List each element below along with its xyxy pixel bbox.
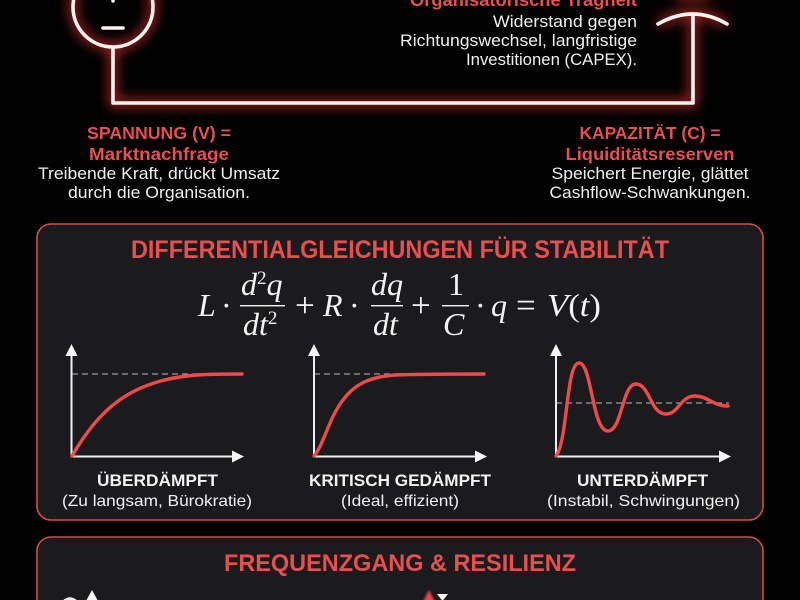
equation: + bbox=[295, 286, 315, 325]
equation: d bbox=[241, 266, 257, 302]
equation: 2 bbox=[268, 308, 277, 329]
text block: voltage bbox=[38, 123, 280, 202]
icon: left gauge arc bbox=[63, 598, 77, 600]
equation: V(t) bbox=[547, 287, 601, 323]
equation: q bbox=[491, 287, 507, 323]
text block: capacity: KAPAZITÄT (C) = bbox=[580, 123, 720, 143]
equation: · bbox=[475, 287, 486, 323]
label: underdamped: (Instabil, Schwingungen) bbox=[547, 493, 740, 510]
text block: voltage: durch die Organisation. bbox=[68, 184, 250, 202]
label: overdamped: ÜBERDÄMPFT bbox=[97, 471, 219, 490]
icon: left chart arrow bbox=[86, 590, 98, 600]
icon: voltage source bbox=[73, 0, 153, 47]
heading: differential equations: DIFFERENTIALGLEICHUNGEN FÜR STABILITÄT bbox=[131, 235, 669, 264]
equation: · bbox=[221, 287, 232, 323]
chart: underdamped bbox=[550, 344, 731, 462]
icon: red peak bbox=[423, 590, 435, 600]
icon: capacitor plate bbox=[658, 14, 727, 24]
label: critically damped: (Ideal, effizient) bbox=[341, 493, 459, 510]
equation: L bbox=[197, 287, 216, 323]
equation bbox=[197, 266, 601, 342]
equation: = bbox=[516, 286, 536, 325]
equation: dq bbox=[371, 266, 403, 302]
circuit diagram bbox=[73, 0, 727, 103]
icon: right chart arrow bbox=[437, 594, 448, 600]
text block: inertia: Richtungswechsel, langfristige bbox=[400, 32, 637, 50]
equation: dt bbox=[373, 306, 399, 342]
label: underdamped bbox=[547, 471, 740, 510]
equation: C bbox=[443, 306, 465, 342]
chart: critically damped bbox=[308, 344, 487, 462]
text block: capacity bbox=[550, 123, 750, 202]
chart: overdamped bbox=[66, 344, 244, 462]
equation: 2 bbox=[257, 268, 266, 289]
equation: 1 bbox=[448, 266, 464, 302]
text block: inertia: Widerstand gegen bbox=[493, 13, 637, 31]
text block: capacity: Liquiditätsreserven bbox=[566, 144, 734, 164]
text block: capacity: Speichert Energie, glättet bbox=[552, 165, 749, 183]
text block: capacity: Cashflow-Schwankungen. bbox=[550, 184, 750, 202]
label: critically damped: KRITISCH GEDÄMPFT bbox=[309, 471, 492, 490]
text block: inertia: Investitionen (CAPEX). bbox=[466, 51, 637, 69]
panel: differential equations bbox=[37, 224, 763, 520]
equation: dt bbox=[243, 306, 268, 342]
text block: voltage: Treibende Kraft, drückt Umsatz bbox=[38, 165, 280, 183]
label: overdamped: (Zu langsam, Bürokratie) bbox=[62, 493, 252, 510]
text block: voltage: SPANNUNG (V) = bbox=[87, 123, 231, 143]
equation: · bbox=[349, 287, 360, 323]
panel: frequency response bbox=[37, 537, 763, 600]
equation: + bbox=[411, 286, 431, 325]
text block: voltage: Marktnachfrage bbox=[89, 144, 229, 164]
label: critically damped bbox=[309, 471, 492, 510]
equation: R bbox=[322, 287, 343, 323]
label: underdamped: UNTERDÄMPFT bbox=[577, 471, 709, 490]
label: overdamped bbox=[62, 471, 252, 510]
wire loop bbox=[113, 15, 693, 103]
text block: inertia bbox=[400, 0, 637, 69]
equation: q bbox=[266, 266, 282, 302]
heading: frequency response: FREQUENZGANG & RESILIENZ bbox=[224, 550, 576, 577]
